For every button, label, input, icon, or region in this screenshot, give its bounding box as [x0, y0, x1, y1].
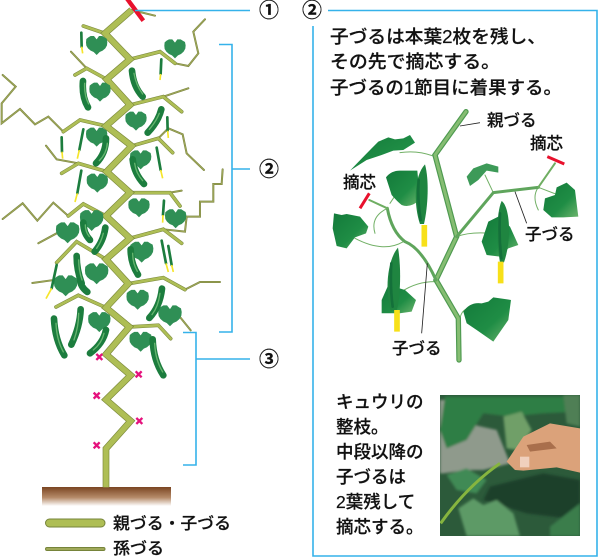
cucumbers: [388, 164, 509, 332]
child vines (子づる): [56, 26, 185, 339]
panel: detail of pinching: [302, 0, 597, 556]
label: pinch left: 摘芯: [343, 173, 376, 192]
label: pinch right: 摘芯: [530, 134, 564, 153]
panel heading text: 子づるは本葉2枚を残し、: [330, 26, 546, 47]
photo caption: 子づるは: [336, 467, 406, 487]
label: parent vine: 親づる: [487, 111, 536, 130]
panel number: ②: [302, 0, 322, 22]
legend swatch: grandchild vine: [46, 548, 105, 550]
photo caption: 2葉残して: [336, 492, 415, 512]
panel frame: [313, 10, 597, 556]
legend: [46, 514, 231, 557]
callout 2 bracket: [219, 44, 250, 332]
photo caption: [336, 392, 424, 537]
ground soil: [42, 487, 171, 506]
red pinch marks: [360, 157, 564, 208]
main vines: [369, 112, 555, 360]
callout 2 number: ②: [259, 158, 279, 181]
panel heading text: その先で摘芯する。: [330, 52, 500, 72]
photo caption: 中段以降の: [336, 442, 424, 462]
red pinch mark at the top: [127, 0, 143, 21]
panel heading text: 子づるの1節目に着果する。: [330, 78, 562, 98]
callout 3 bracket: [183, 332, 250, 465]
small cucumbers with yellow flower tips: [46, 33, 173, 299]
label: child vine bottom: 子づる: [392, 339, 442, 358]
legend swatch: parent and child vine: [46, 519, 105, 527]
leaves: [54, 36, 186, 352]
label: child vine right: 子づる: [525, 225, 574, 244]
plant detail drawing: [333, 112, 578, 360]
leader lines: [422, 123, 527, 333]
pink x marks: removed side shoots: [94, 354, 142, 448]
callout 1 number: ①: [259, 0, 279, 22]
callout 3 number: ③: [259, 348, 279, 371]
panel heading text: [330, 26, 562, 98]
petioles and tendrils: [355, 152, 558, 318]
callout 1 leader line: [135, 10, 250, 12]
parent vine (親づる): [105, 10, 132, 487]
photo caption: 摘芯する。: [336, 517, 424, 537]
photo caption: 整枝。: [336, 417, 388, 437]
photo caption: キュウリの: [336, 392, 424, 412]
plant drawing: [2, 0, 223, 487]
left diagram: whole cucumber plant: [2, 0, 223, 506]
large cucumbers: [54, 71, 163, 375]
leaves: [333, 135, 578, 342]
legend label: parent and child vine: 親づる・子づる: [113, 514, 231, 533]
photo: hand pinching a cucumber shoot: [440, 395, 580, 536]
grandchild vines (孫づる): [2, 10, 223, 330]
